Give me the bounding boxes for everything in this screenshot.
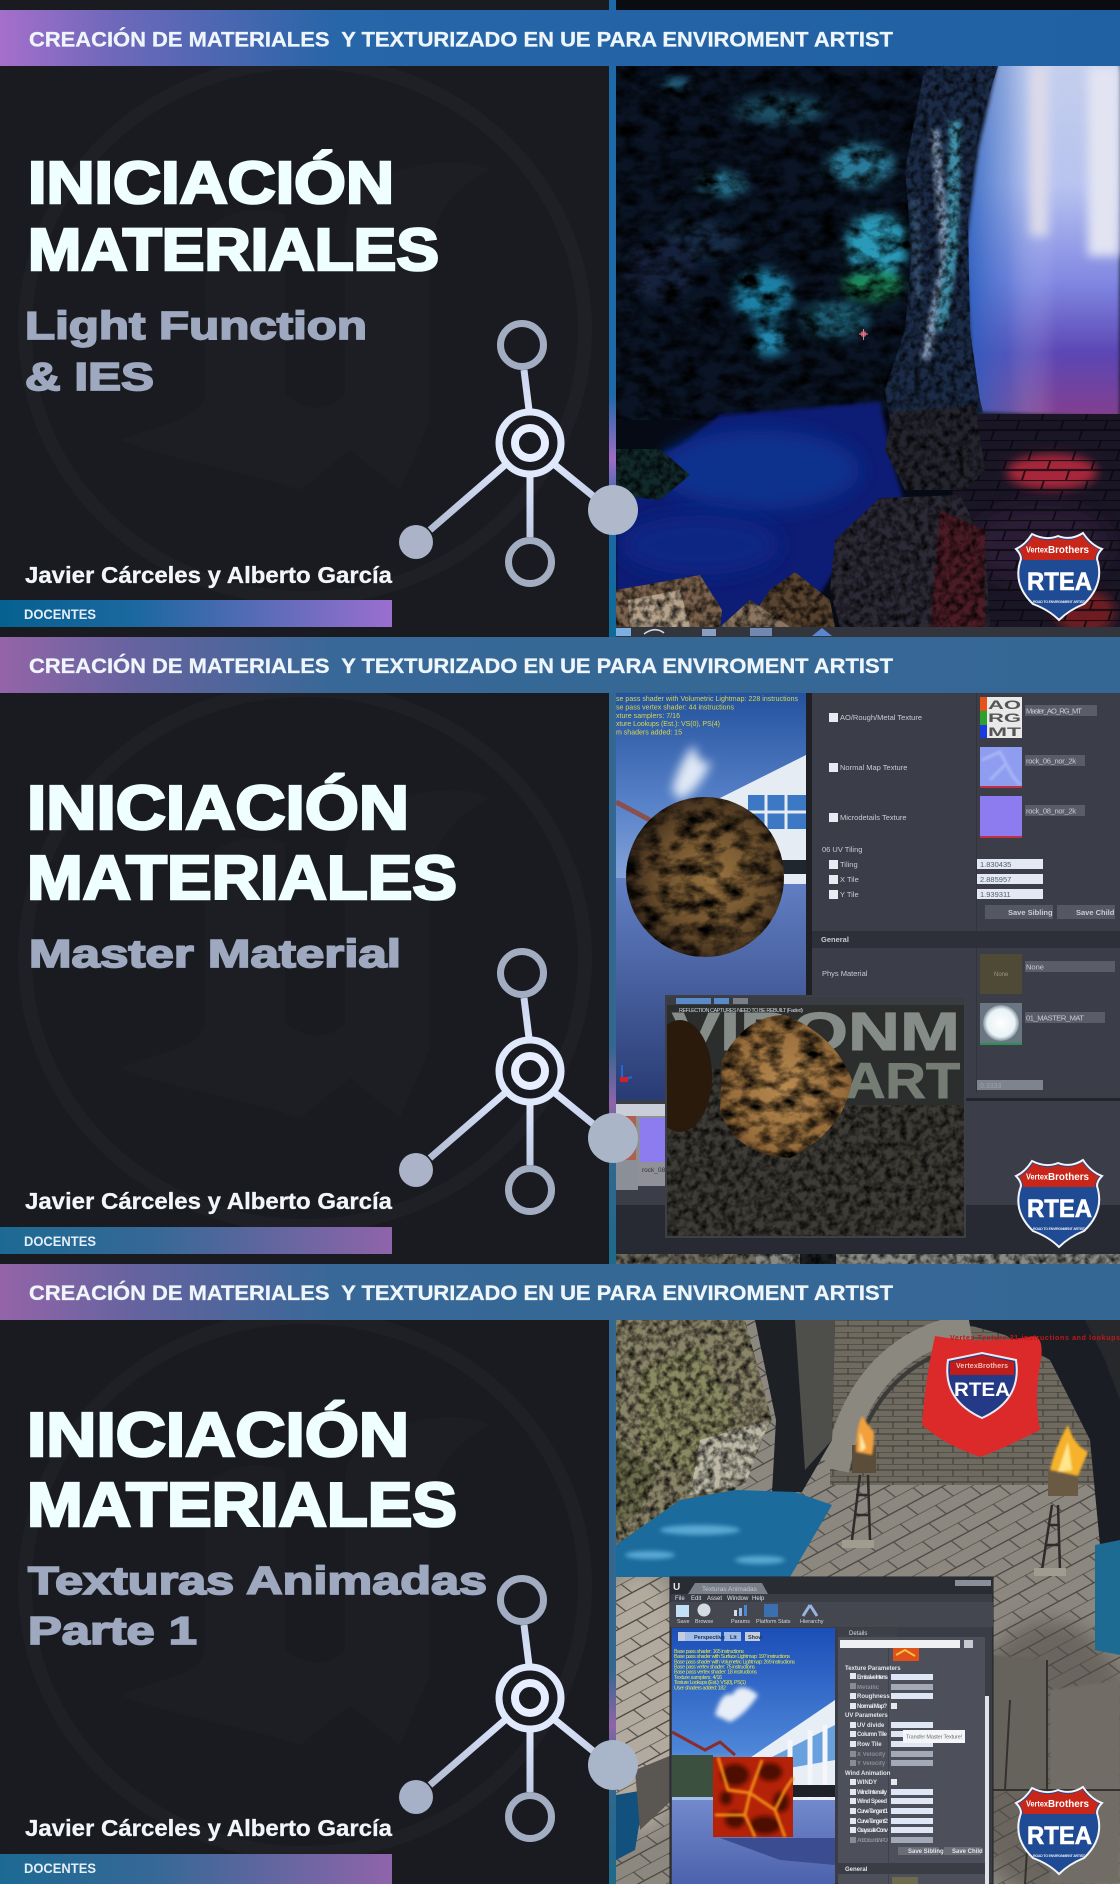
docentes bar xyxy=(0,1854,392,1884)
badge: RTEA xyxy=(1016,1160,1102,1247)
background watermark logo xyxy=(25,1317,585,1853)
editor window: Help xyxy=(752,1596,765,1602)
editor viewport: Show xyxy=(748,1635,763,1641)
editor window: File xyxy=(675,1596,685,1602)
authors: Javier Cárceles y Alberto García xyxy=(25,562,392,588)
badge: RTEA: Brothers xyxy=(1048,1798,1089,1810)
editor details panel: WINDY xyxy=(857,1780,877,1786)
lava texture xyxy=(713,1757,793,1837)
title: INICIACIÓN xyxy=(27,1401,409,1470)
editor details panel: Column Tile xyxy=(857,1732,888,1738)
title: INICIACIÓN xyxy=(28,150,394,216)
panel: Texturas Animadas Parte 1 xyxy=(0,1264,1120,1884)
background watermark logo xyxy=(25,690,585,1226)
badge: RTEA: Brothers xyxy=(1048,544,1089,556)
editor viewport: Base pass shader with Surface Lightmap: 197 instructions xyxy=(674,1654,790,1660)
image: dark cave with blue water xyxy=(616,0,1120,637)
editor viewport: Base pass shader: 165 instructions xyxy=(674,1649,744,1655)
header bar xyxy=(0,10,1120,66)
editor details panel: Roughness xyxy=(857,1694,890,1700)
badge: RTEA: RTEA xyxy=(1027,1195,1092,1223)
viewport with sphere: m shaders added: 15 xyxy=(616,730,682,736)
details panel rows: General xyxy=(821,935,849,944)
docentes bar: DOCENTES xyxy=(24,607,96,622)
details panel rows: X Tile xyxy=(840,875,859,884)
details panel rows: Normal Map Texture xyxy=(840,763,907,772)
title xyxy=(27,774,457,913)
subtitle: & IES xyxy=(25,356,154,399)
editor viewport: Texture samplers: 4/16 xyxy=(674,1675,722,1681)
editor details panel: UV Parameters xyxy=(845,1713,888,1719)
editor window: Hierarchy xyxy=(800,1619,824,1625)
subtitle: Parte 1 xyxy=(28,1610,197,1653)
details panel rows: Phys Material xyxy=(822,969,868,978)
header bar: CREACIÓN DE MATERIALES Y TEXTURIZADO EN UE PARA ENVIROMENT ARTIST xyxy=(29,654,893,678)
vertical divider xyxy=(609,693,616,1264)
editor viewport: Lit xyxy=(730,1635,737,1641)
editor details panel: Texture Parameters xyxy=(845,1666,901,1672)
editor details panel: UV divide xyxy=(857,1723,885,1729)
subtitle: Light Function xyxy=(25,305,367,348)
viewport with sphere: xture Lookups (Est.): VS(0), PS(4) xyxy=(616,721,720,728)
red banner xyxy=(922,1336,1042,1457)
icon: node network xyxy=(399,1578,638,1838)
editor details panel: Y Velocity xyxy=(857,1761,886,1767)
editor details panel: Save Child xyxy=(952,1849,983,1855)
viewport with sphere: se pass vertex shader: 44 instructions xyxy=(616,704,734,712)
details panel rows: Tiling xyxy=(840,860,858,869)
editor details panel: Emissive Intens xyxy=(857,1675,889,1681)
header bar: CREACIÓN DE MATERIALES Y TEXTURIZADO EN UE PARA ENVIROMENT ARTIST xyxy=(29,28,893,52)
details panel rows: RG xyxy=(988,711,1021,725)
details panel rows: AO xyxy=(988,698,1021,712)
editor window: Save xyxy=(677,1619,690,1625)
details panel rows: 0.3333 xyxy=(980,1083,1002,1090)
docentes bar: DOCENTES xyxy=(24,1234,96,1249)
details panel rows: rock_06_nor_2k xyxy=(1026,756,1076,766)
header bar xyxy=(0,637,1120,693)
title: MATERIALES xyxy=(27,1471,457,1540)
darker floor slabs xyxy=(635,1655,1120,1884)
title xyxy=(27,1401,457,1540)
vertical divider xyxy=(609,1320,616,1884)
docentes bar xyxy=(0,1227,392,1254)
editor window: Texturas Animadas xyxy=(702,1586,758,1593)
editor viewport: Base pass vertex shader: 18 instructions xyxy=(674,1670,757,1676)
details panel rows: 1.830435 xyxy=(980,860,1011,869)
details panel rows: Y Tile xyxy=(840,890,859,899)
subtitle: Master Material xyxy=(29,933,401,976)
editor details panel: Curve Tangent 2 xyxy=(857,1819,889,1825)
badge: RTEA: ROAD TO ENVIRONMENT ARTIST xyxy=(1033,600,1086,604)
panel: Master Material xyxy=(0,637,1120,1264)
inset viewport with rock: VIRONM xyxy=(672,1002,960,1062)
details panel rows xyxy=(812,697,1120,1090)
header bar xyxy=(0,1264,1120,1320)
badge: RTEA: RTEA xyxy=(1027,568,1092,596)
badge: RTEA: Vertex xyxy=(1026,546,1048,554)
editor window: U xyxy=(673,1582,680,1593)
editor toolbar strip xyxy=(616,627,1120,637)
editor details panel: Wind Intensity xyxy=(857,1790,888,1796)
editor details panel: Wind Speed xyxy=(857,1799,887,1805)
editor window: Window xyxy=(727,1596,749,1602)
editor viewport: Texture Lookups (Est.): VS(0), PS(1) xyxy=(674,1680,746,1686)
details panel rows: None xyxy=(1026,962,1044,972)
inset viewport with rock: ART xyxy=(845,1053,960,1109)
backdrop light xyxy=(960,60,1120,418)
editor viewport xyxy=(672,1628,835,1884)
editor details panel: Wind Animation xyxy=(845,1771,891,1777)
viewport with sphere: se pass shader with Volumetric Lightmap: 228 instructions xyxy=(616,696,798,703)
editor details panel: General xyxy=(845,1867,868,1873)
icon: node network xyxy=(399,324,638,584)
editor details panel: Grayscale Conv xyxy=(857,1828,889,1834)
cobble floor xyxy=(950,414,1120,627)
editor window: Edit xyxy=(691,1596,702,1602)
editor details panel xyxy=(838,1628,989,1884)
editor window: Browse xyxy=(695,1619,713,1625)
details panel rows: Save Child xyxy=(1076,908,1115,917)
badge: RTEA xyxy=(1016,533,1102,620)
background watermark logo xyxy=(25,62,585,598)
editor viewport: Base pass shader with Volumetric Lightmap: 269 instructions xyxy=(674,1660,795,1666)
subtitle xyxy=(28,1560,487,1653)
editor window xyxy=(670,1577,993,1884)
details panel rows: 01_MASTER_MAT xyxy=(1026,1014,1084,1022)
castle wall xyxy=(830,1320,1120,1545)
editor viewport: Base pass vertex shader: 75 instructions xyxy=(674,1664,755,1670)
icon: node network xyxy=(399,952,638,1212)
title: MATERIALES xyxy=(27,844,457,913)
details panel rows: rock_08_nor_2k xyxy=(1026,806,1076,816)
details panel rows: Save Sibling xyxy=(1008,908,1053,917)
inset viewport with rock: REFLECTION CAPTURES NEED TO BE REBUILT (Faded) xyxy=(679,1008,803,1014)
details panel rows: MT xyxy=(988,725,1022,739)
badge: RTEA: Vertex xyxy=(1026,1800,1048,1808)
title: MATERIALES xyxy=(28,217,439,283)
lower panel and thumbnails: rock_08 xyxy=(642,1167,666,1174)
top image strip xyxy=(616,0,1120,10)
badge: RTEA: ROAD TO ENVIRONMENT ARTIST xyxy=(1033,1227,1086,1231)
details panel rows: None xyxy=(994,972,1009,978)
docentes bar xyxy=(0,600,392,627)
image: castle scene xyxy=(590,1320,1120,1884)
title xyxy=(28,150,439,283)
editor details panel: AddGroundWPO xyxy=(857,1838,888,1844)
badge: RTEA: ROAD TO ENVIRONMENT ARTIST xyxy=(1033,1854,1086,1858)
lower panel and thumbnails xyxy=(616,1098,1120,1254)
editor viewport: User shaders added: 182 xyxy=(674,1686,726,1692)
viewport with sphere: xture samplers: 7/16 xyxy=(616,713,680,720)
authors: Javier Cárceles y Alberto García xyxy=(25,1188,392,1214)
details panel rows: AO/Rough/Metal Texture xyxy=(840,713,922,722)
subtitle: Texturas Animadas xyxy=(28,1560,487,1603)
badge: RTEA xyxy=(1016,1787,1102,1874)
editor window: Platform Stats xyxy=(756,1619,791,1625)
vertical divider xyxy=(609,0,616,637)
inset viewport with rock xyxy=(648,995,966,1238)
viewport with sphere xyxy=(616,693,806,1100)
badge: RTEA: Brothers xyxy=(1048,1171,1089,1183)
editor details panel: Transfer Master Texture! xyxy=(906,1734,962,1740)
authors: Javier Cárceles y Alberto García xyxy=(25,1815,392,1841)
editor viewport: Perspective xyxy=(694,1635,725,1641)
image: castle scene: Vertex Texture 31 instructions and lookups xyxy=(950,1335,1120,1342)
stone strip xyxy=(616,1254,1120,1264)
editor window: Asset xyxy=(707,1596,722,1602)
editor details panel: Normal Map? xyxy=(857,1704,887,1710)
details panel rows: 1.939311 xyxy=(980,890,1011,899)
editor details panel: Row Tile xyxy=(857,1742,882,1748)
header bar: CREACIÓN DE MATERIALES Y TEXTURIZADO EN UE PARA ENVIROMENT ARTIST xyxy=(29,1281,893,1305)
details panel rows: 2.885957 xyxy=(980,875,1011,884)
image: material editor xyxy=(616,693,1120,1264)
badge: RTEA: Vertex xyxy=(1026,1172,1048,1182)
red banner: RTEA xyxy=(954,1380,1010,1401)
rock and column xyxy=(616,1320,772,1545)
water xyxy=(616,1490,832,1577)
torches xyxy=(842,1416,1088,1576)
details panel rows: Microdetails Texture xyxy=(840,813,907,822)
editor details panel: Save Sibling xyxy=(908,1849,944,1855)
docentes bar: DOCENTES xyxy=(24,1861,96,1876)
editor details panel: Curve Tangent 1 xyxy=(857,1809,889,1815)
badge: RTEA: RTEA xyxy=(1027,1822,1092,1850)
editor window: Params xyxy=(731,1619,750,1625)
panel: Light Function & IES xyxy=(0,0,1120,637)
details panel rows: Master_AO_RG_MT xyxy=(1026,706,1082,716)
subtitle xyxy=(25,305,367,399)
editor details panel: Details xyxy=(849,1631,867,1637)
editor details panel: X Velocity xyxy=(857,1752,886,1758)
details panel rows: 06 UV Tiling xyxy=(822,845,862,854)
editor details panel: Metallic xyxy=(857,1685,880,1691)
red banner: VertexBrothers xyxy=(956,1363,1008,1370)
water xyxy=(616,402,905,627)
cursor marker xyxy=(859,329,868,340)
title: INICIACIÓN xyxy=(27,774,409,843)
